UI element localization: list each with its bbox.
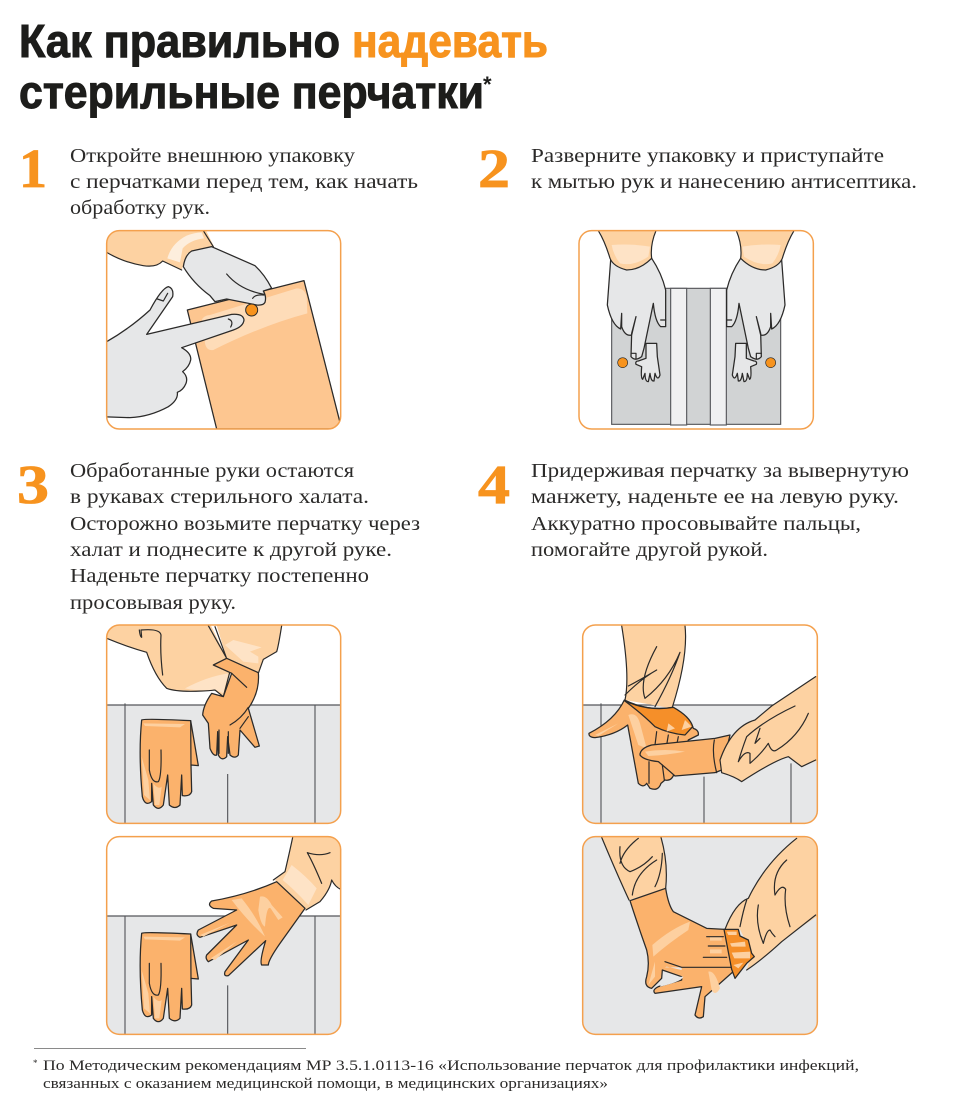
hanging glove (203, 658, 259, 759)
footnote: связанных с оказанием медицинской помощи, в медицинских организациях» (43, 1076, 608, 1092)
step 2 number: 2 (478, 138, 510, 199)
panel: opening outer package (100, 225, 342, 429)
reaching gloved hand (197, 882, 305, 976)
sleeve (273, 835, 343, 910)
panel: pulling on glove (583, 623, 818, 825)
step 4 text: Аккуратно просовывайте пальцы, (531, 513, 861, 535)
step 4 text: Придерживая перчатку за вывернутую (531, 460, 909, 482)
title: стерильные перчатки (19, 66, 484, 118)
title: надевать (352, 15, 548, 67)
panel: unfolding package (579, 225, 813, 429)
step 1 text: с перчатками перед тем, как начать (70, 171, 418, 193)
left sleeve (622, 623, 686, 708)
step 3 text: Осторожно возьмите перчатку через (70, 513, 420, 535)
step 4 text (531, 460, 909, 561)
step 3 text (70, 460, 420, 614)
left sleeve (602, 835, 666, 900)
marker dot left (618, 358, 628, 368)
panel: adjusting glove fingers (583, 835, 820, 1034)
arm (107, 231, 214, 271)
table (583, 703, 817, 825)
gray hand pointing (100, 287, 244, 418)
gloved left hand (589, 700, 698, 789)
footnote (33, 1058, 859, 1092)
folded glove (140, 933, 198, 1022)
step 2 text: к мытью рук и нанесению антисептика. (531, 171, 917, 193)
title: Как правильно (19, 15, 340, 67)
step 3 text: Наденьте перчатку постепенно (70, 565, 369, 587)
step 3 text: в рукавах стерильного халата. (70, 486, 369, 508)
folded glove (140, 719, 198, 808)
gloved hand (630, 888, 735, 1018)
panel: picking up glove through gown (100, 620, 341, 825)
step 1 text: обработку рук. (70, 197, 210, 219)
step 4 number: 4 (478, 454, 510, 515)
helper hand glove (640, 735, 730, 783)
right sleeve (725, 837, 820, 970)
inverted cuff (724, 929, 754, 978)
step 2 text: Разверните упаковку и приступайте (531, 145, 884, 167)
right hand (727, 225, 794, 382)
title (19, 15, 548, 118)
step 1 text: Откройте внешнюю упаковку (70, 145, 356, 167)
gown sleeves (107, 626, 282, 696)
step 3 text: просовывая руку. (70, 592, 236, 614)
marker dot (246, 304, 258, 316)
title: * (483, 72, 492, 97)
footnote: По Методическим рекомендациям МР 3.5.1.0113-16 «Использование перчаток для профилактики инфекций, (43, 1058, 859, 1074)
step 2 text (531, 145, 917, 193)
step 4 text: манжету, наденьте ее на левую руку. (531, 486, 899, 508)
marker dot right (766, 358, 776, 368)
table (107, 916, 341, 1036)
step 3 number: 3 (17, 454, 49, 515)
footnote: * (33, 1058, 38, 1068)
table (107, 703, 341, 825)
step 3 text: халат и поднесите к другой руке. (70, 539, 392, 561)
step 1 number: 1 (19, 138, 47, 199)
step 3 text: Обработанные руки остаются (70, 460, 355, 482)
step 4 text: помогайте другой рукой. (531, 539, 768, 561)
footnote rule (34, 1048, 306, 1049)
package (187, 281, 342, 429)
step 1 text (70, 145, 418, 219)
right sleeve (720, 675, 818, 782)
unfolded package (612, 288, 781, 425)
left hand (598, 225, 666, 382)
gray hand top (183, 247, 272, 305)
panel: reaching for glove (107, 835, 343, 1036)
